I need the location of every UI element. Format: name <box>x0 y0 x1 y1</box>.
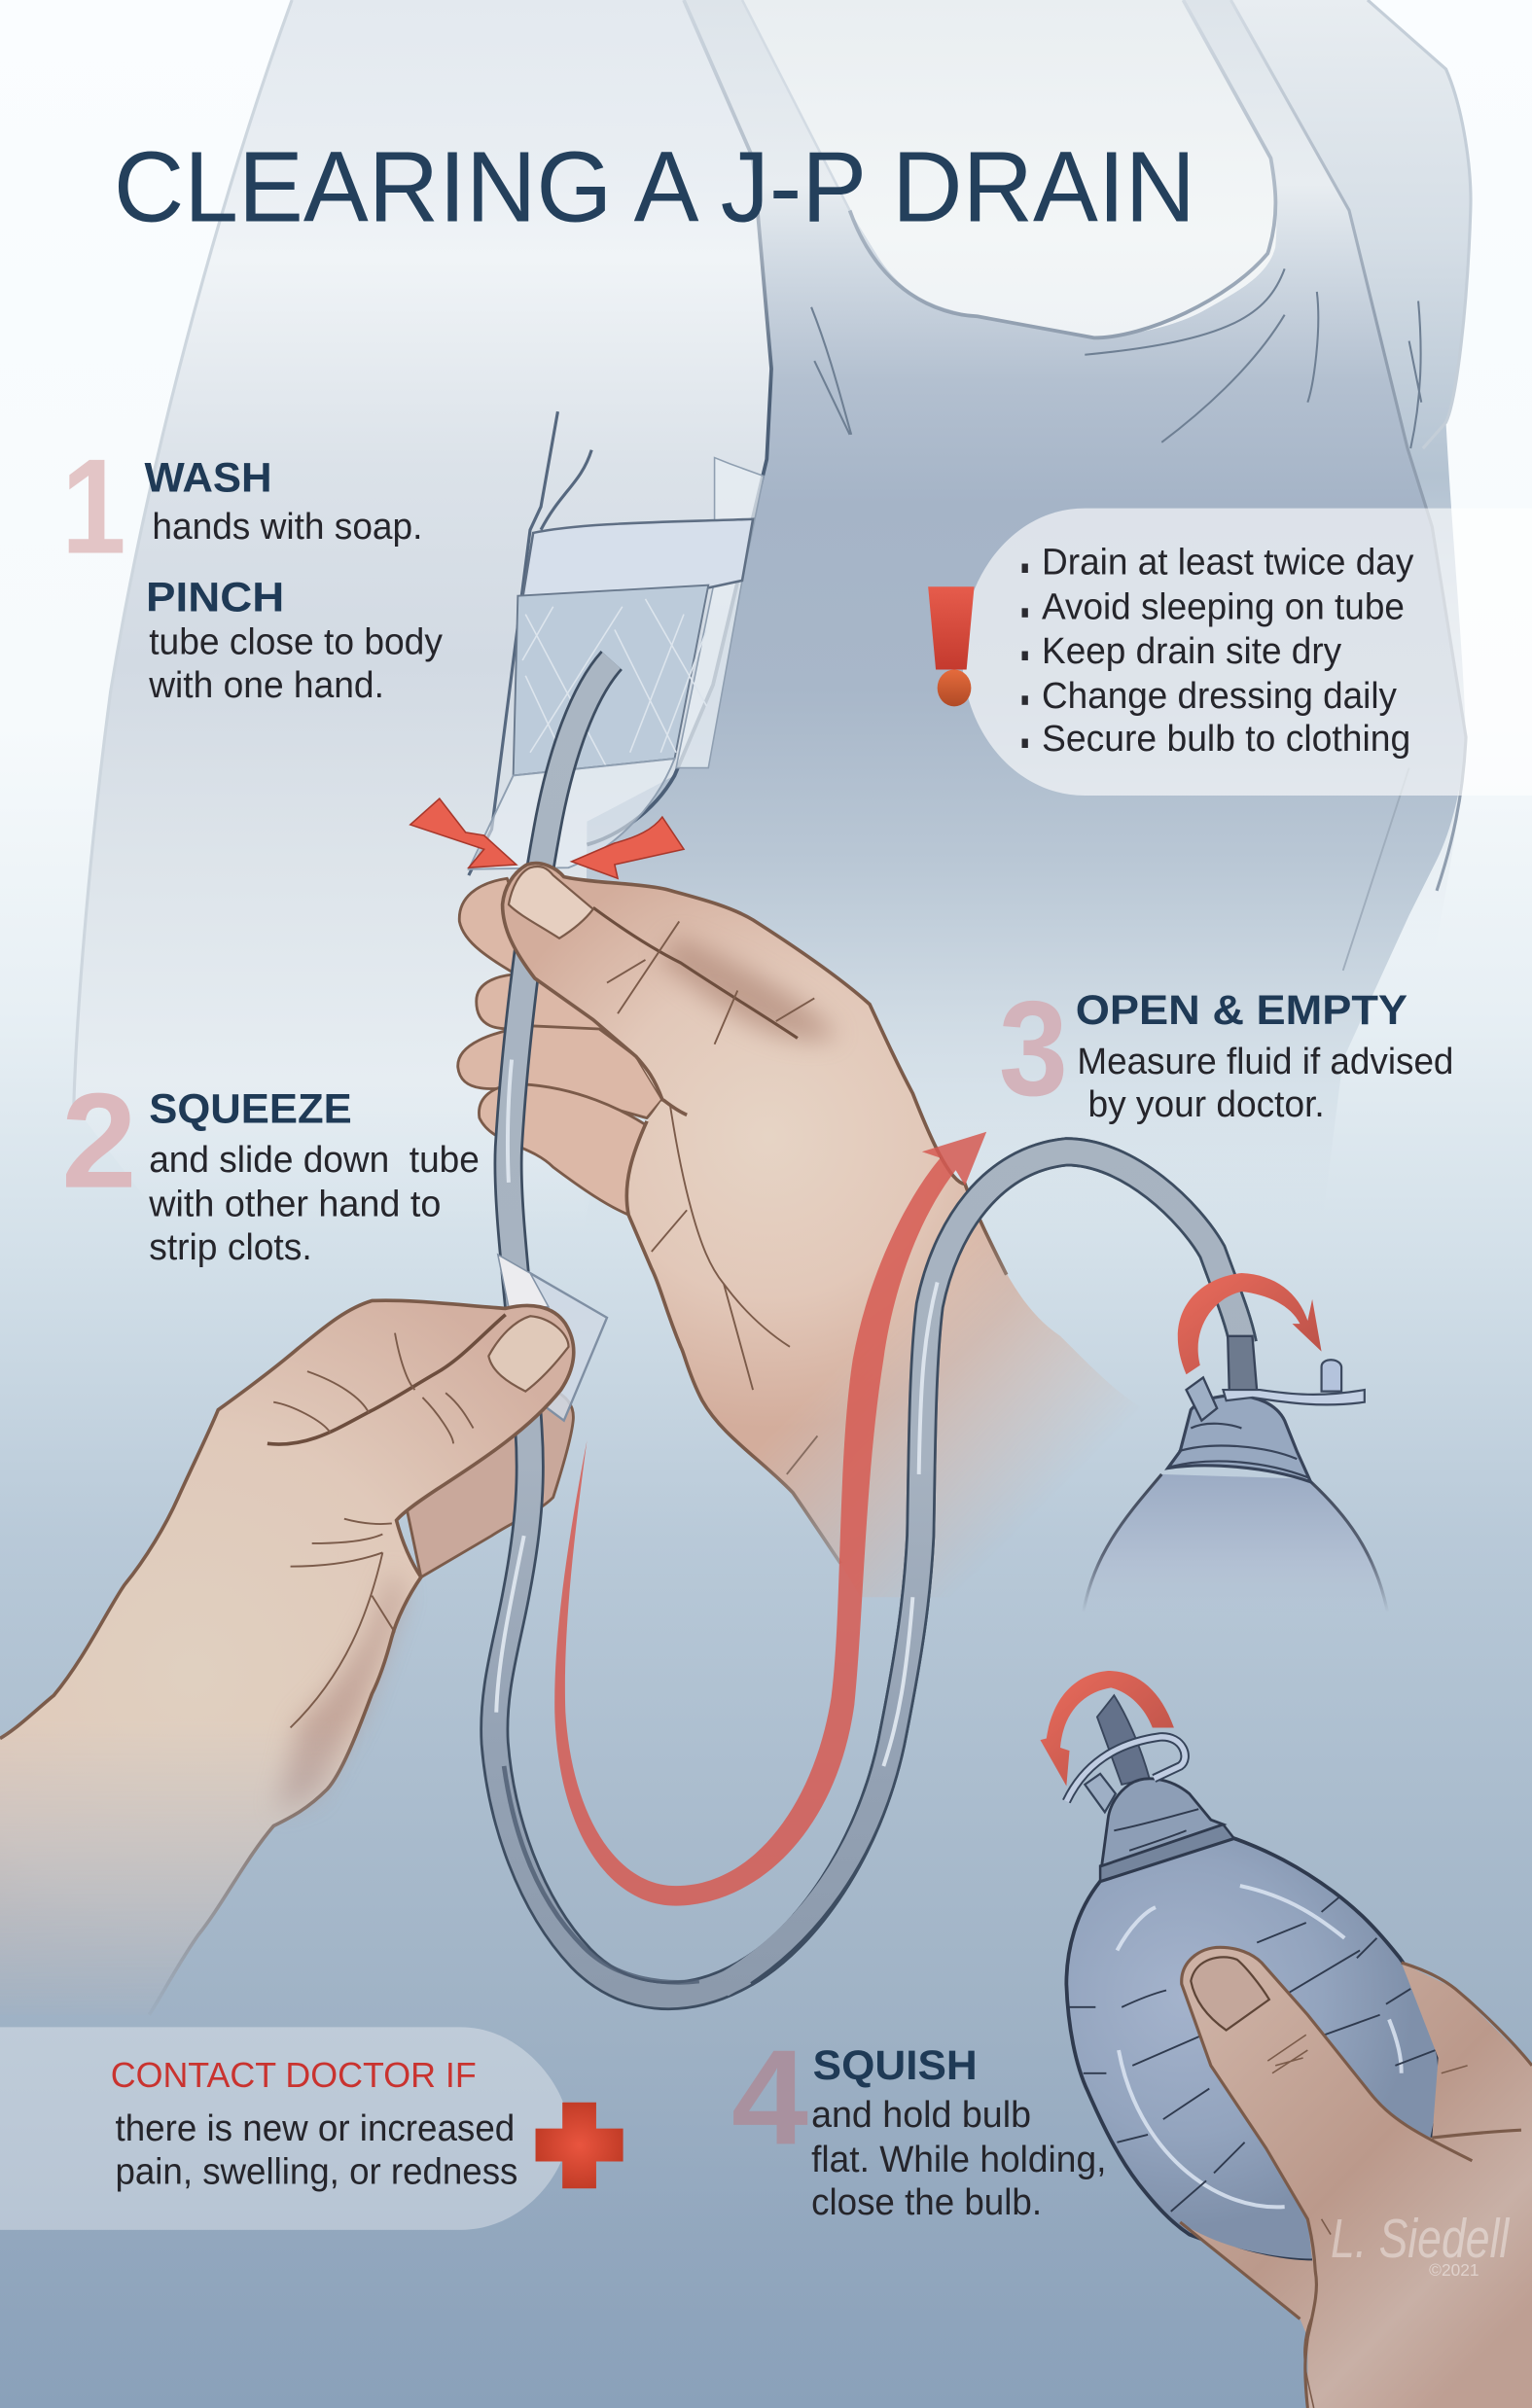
closed cap strap <box>1066 1737 1185 1801</box>
illustration: gauze pad used to strip tube <box>498 1255 607 1421</box>
gauze pad <box>514 585 708 775</box>
knuckle lines <box>1267 2035 1468 2408</box>
bulb highlights <box>1117 1886 1402 2207</box>
number 4: 4 <box>731 2022 808 2173</box>
right pinch arrow <box>572 817 684 878</box>
tips list: Keep drain site dry <box>1042 631 1341 672</box>
squish text: and hold bulb <box>811 2095 1031 2136</box>
palm lines <box>607 921 817 1474</box>
title: CLEARING A J-P DRAIN <box>114 130 1195 242</box>
step 4 <box>731 2022 1106 2223</box>
side port <box>1187 1377 1217 1421</box>
step 3 <box>999 974 1453 1125</box>
cap peg <box>1322 1360 1341 1392</box>
squeeze text: strip clots. <box>149 1227 312 1268</box>
tape band <box>522 519 753 599</box>
tips list: Secure bulb to clothing <box>1042 719 1410 760</box>
clear film <box>676 458 764 768</box>
panel: contact doctor <box>0 2027 623 2230</box>
squeeze text: with other hand to <box>148 1185 441 1225</box>
illustration: patient torso and tank top <box>74 0 1471 1228</box>
contact heading: CONTACT DOCTOR IF <box>111 2055 477 2095</box>
contact text <box>115 2108 517 2192</box>
open bulb illustration <box>1084 1273 1388 1612</box>
cap strap <box>1223 1390 1365 1404</box>
copyright: ©2021 <box>1429 2260 1479 2280</box>
pinch text: with one hand. <box>148 665 384 706</box>
tips list: Avoid sleeping on tube <box>1042 586 1405 627</box>
panel background <box>0 2027 569 2230</box>
far arm <box>1214 0 1471 1075</box>
illustration: drain tube <box>494 660 1243 1996</box>
thumb crease <box>267 1315 506 1444</box>
pinch heading: PINCH <box>146 574 284 620</box>
hand outline <box>0 1300 574 2015</box>
armpit crease <box>469 411 591 875</box>
tube connector <box>1228 1336 1257 1392</box>
squish text: close the bulb. <box>811 2182 1042 2223</box>
bulb neck <box>1102 1779 1223 1866</box>
icon: medical cross <box>536 2103 623 2188</box>
hand outline <box>503 864 1007 1564</box>
squeeze text <box>148 1140 480 1268</box>
wash heading: WASH <box>144 454 272 501</box>
shaded web of thumb <box>660 937 837 1040</box>
squish text: flat. While holding, <box>811 2140 1106 2180</box>
thumb crease <box>593 907 798 1038</box>
step 2 <box>61 1066 480 1268</box>
open and empty text: Measure fluid if advised <box>1077 1042 1453 1082</box>
collar lines <box>1171 1424 1307 1477</box>
number 1: 1 <box>61 431 126 582</box>
tube stub <box>1097 1695 1150 1785</box>
illustration: fingers behind tube <box>400 878 662 1577</box>
open and empty heading: OPEN & EMPTY <box>1076 987 1407 1034</box>
open and empty text: by your doctor. <box>1087 1084 1325 1125</box>
neck ridges <box>1114 1809 1198 1851</box>
knuckle lines <box>273 1333 474 1727</box>
tips list <box>1022 543 1413 760</box>
tips list: Drain at least twice day <box>1042 543 1413 584</box>
icon: exclamation mark <box>928 586 975 706</box>
number 2: 2 <box>61 1066 137 1217</box>
illustration: tube over forearm and arch to bulb <box>722 1151 1243 1986</box>
left pinch arrow <box>410 798 517 868</box>
bulb outline <box>1084 1474 1388 1612</box>
bulb body <box>1066 1838 1440 2260</box>
gauze weave <box>522 599 707 768</box>
closing rotation arrow <box>1040 1671 1174 1786</box>
shirt outlines <box>74 0 1471 1106</box>
shaded palm heel <box>276 1567 403 1812</box>
neckline skin <box>742 0 1276 337</box>
bulb ridges <box>1066 1896 1435 2212</box>
squish heading: SQUISH <box>813 2042 978 2089</box>
illustration: upper hand pinching tube <box>503 864 1146 1597</box>
squeezed bulb illustration <box>1040 1671 1440 2260</box>
open and empty text <box>1077 1042 1453 1125</box>
number 3: 3 <box>999 974 1068 1124</box>
hand outline <box>1180 1947 1532 2408</box>
bulb neck <box>1168 1396 1311 1482</box>
pinch text: tube close to body <box>149 622 443 663</box>
collar <box>1100 1824 1234 1881</box>
lower film <box>469 759 675 869</box>
thumbnail <box>509 867 593 938</box>
squeeze heading: SQUEEZE <box>149 1085 352 1132</box>
squeeze text: and slide down tube <box>149 1140 480 1181</box>
thumbnail <box>1191 1957 1269 2031</box>
panel: care tips <box>928 509 1532 796</box>
panel background <box>962 509 1532 796</box>
arm <box>74 0 771 1228</box>
illustration: wound dressing <box>469 458 764 869</box>
side port <box>1085 1774 1116 1812</box>
contact text: pain, swelling, or redness <box>115 2151 517 2192</box>
open rotation arrow <box>1178 1273 1322 1374</box>
wash text: hands with soap. <box>152 507 422 548</box>
thumbnail <box>488 1316 569 1392</box>
hand squishing the bulb <box>1180 1947 1532 2408</box>
squish text <box>811 2095 1106 2223</box>
illustration: lower hand stripping tube <box>0 1300 574 2015</box>
contact text: there is new or increased <box>115 2108 515 2149</box>
tips list: Change dressing daily <box>1042 676 1397 717</box>
pinch text <box>148 622 443 706</box>
step 1 <box>61 431 443 706</box>
bulb body <box>1084 1474 1388 1612</box>
tank top <box>584 0 1466 1228</box>
red direction path arrow <box>554 1132 986 1906</box>
